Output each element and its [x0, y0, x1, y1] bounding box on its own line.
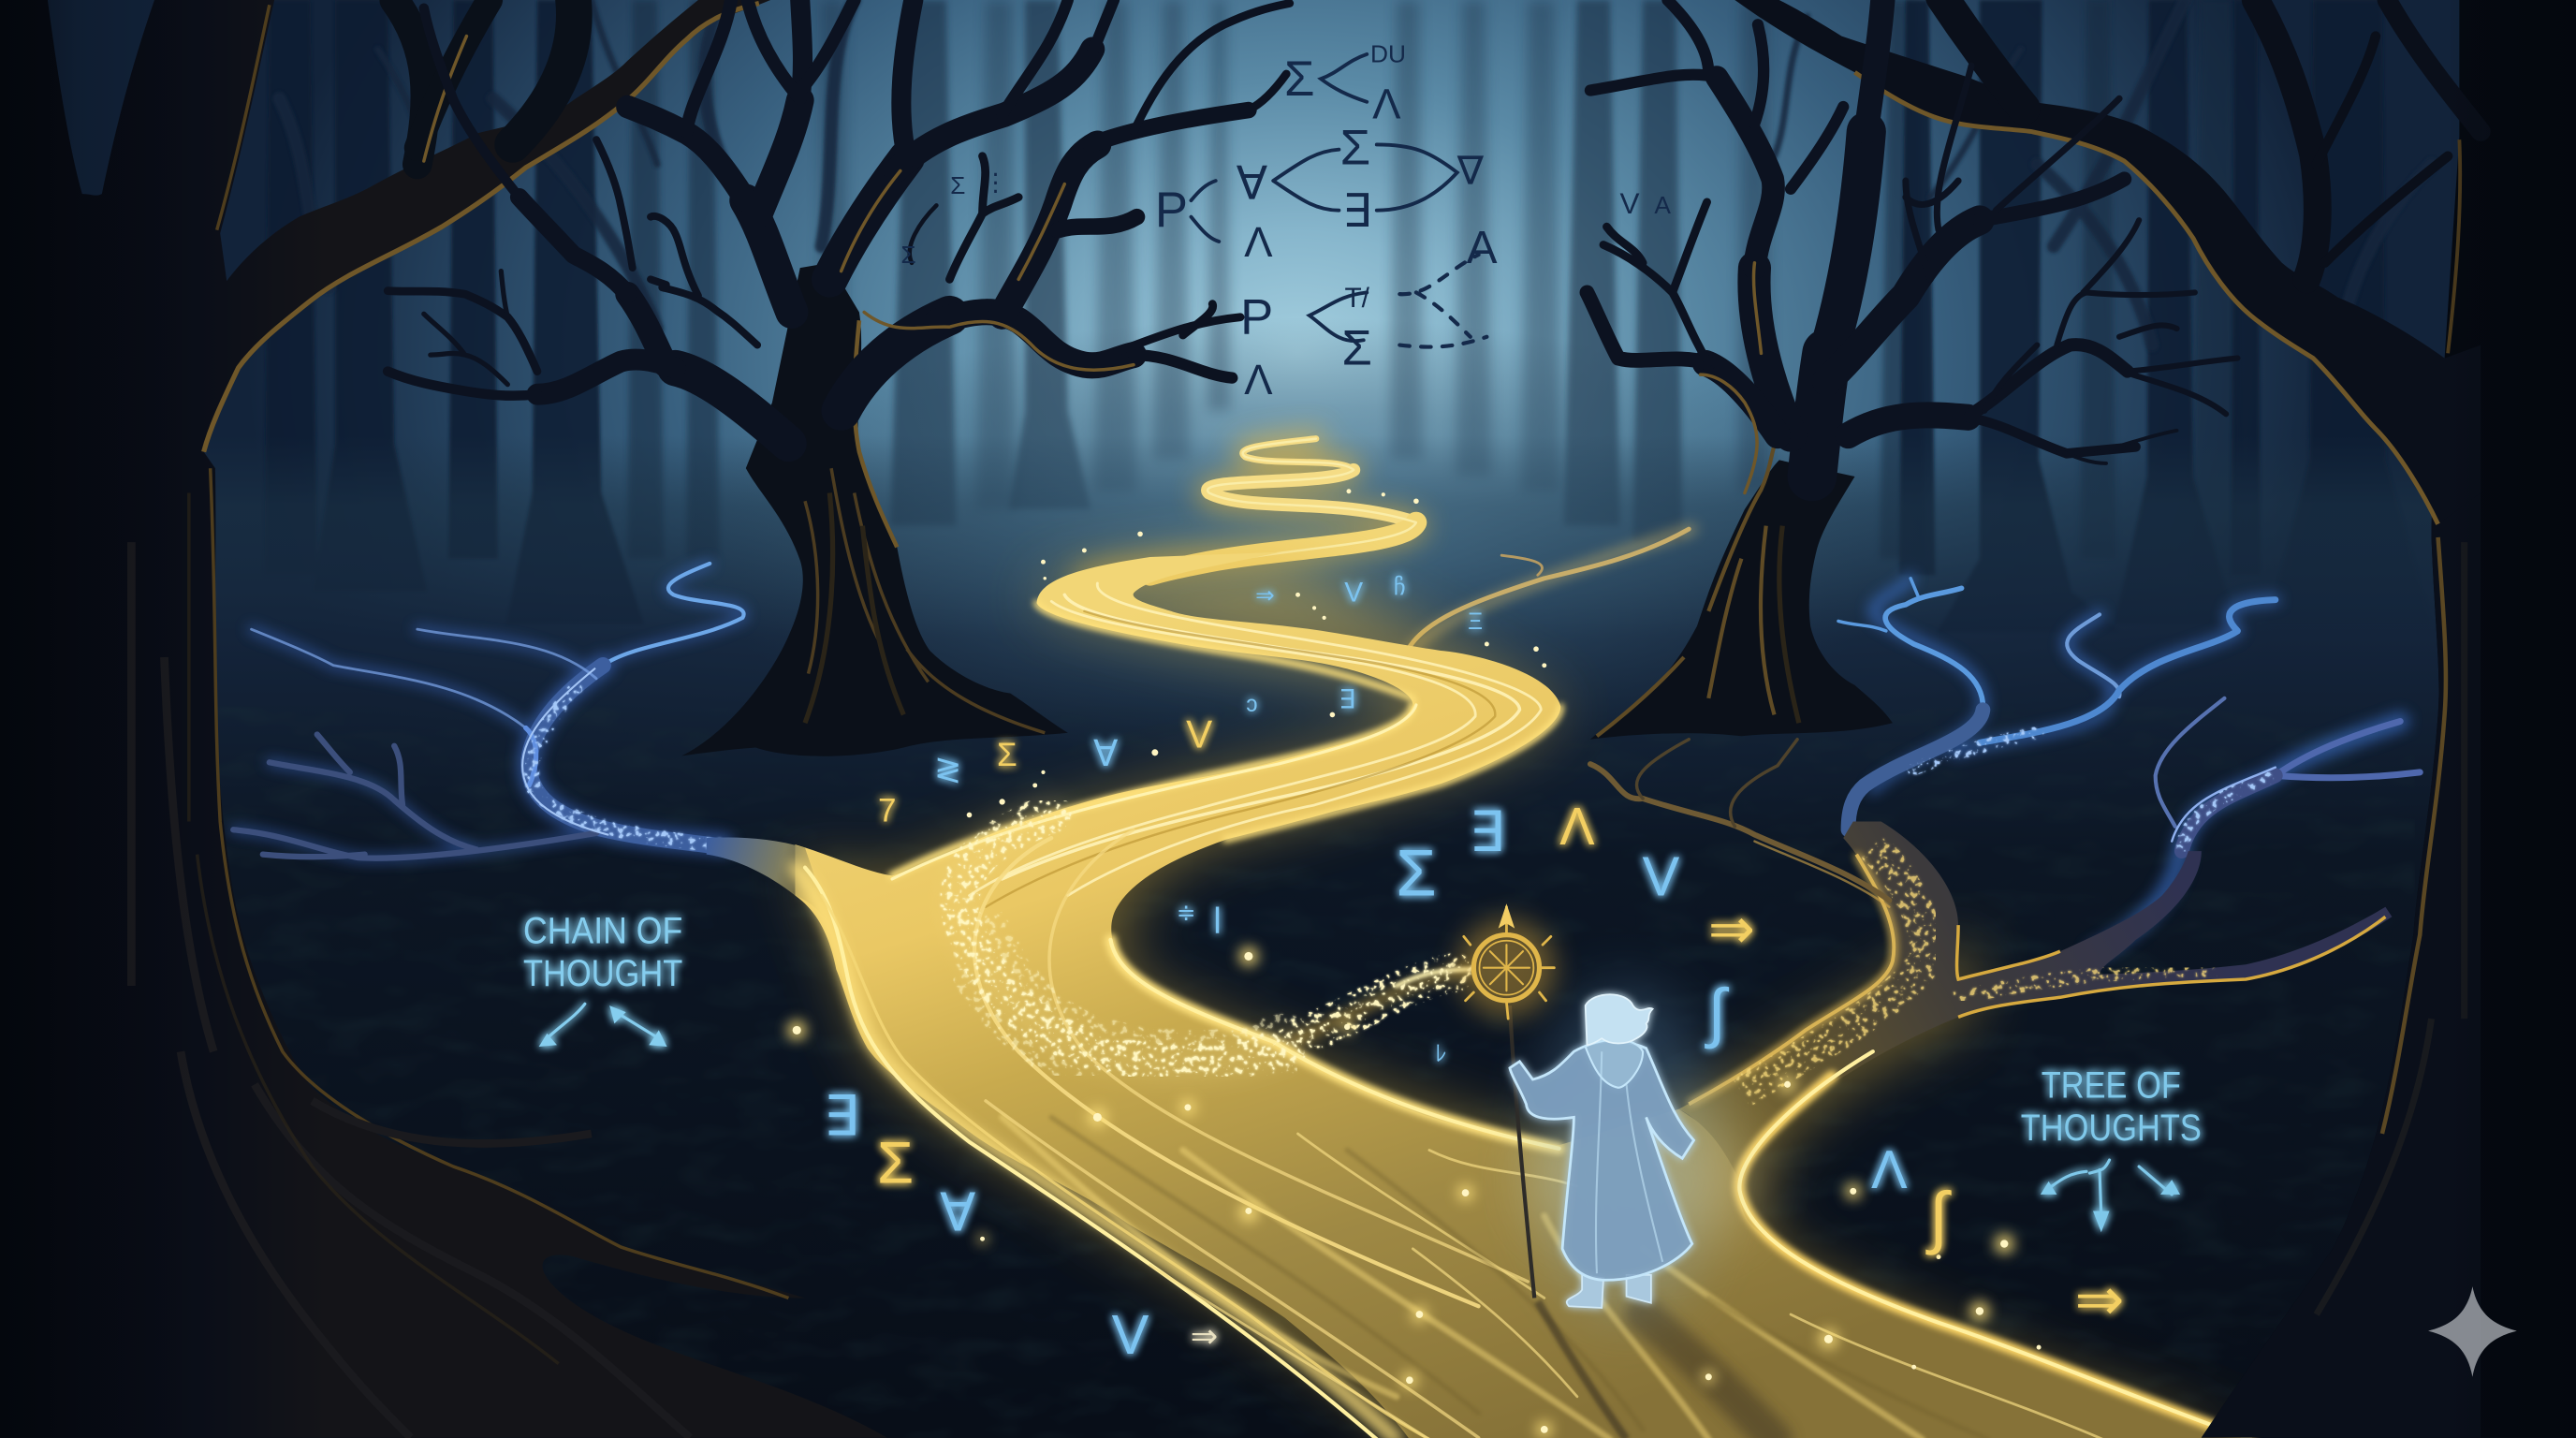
floating blue logic symbols: V — [1344, 577, 1363, 608]
floating gold logic symbols: ∫ — [1925, 1178, 1952, 1255]
floating gold logic symbols: Σ — [997, 737, 1017, 773]
label: tree of thoughts — [2021, 1064, 2202, 1232]
decision tree symbols woven in branches: Λ — [1372, 80, 1401, 127]
right giant tree — [2202, 0, 2576, 1438]
gold winding path: far squiggle — [1084, 439, 1417, 579]
floating blue logic symbols: ⇒ — [1191, 1318, 1218, 1355]
floating gold logic symbols: ⇒ — [2075, 1267, 2124, 1332]
floating blue logic symbols: Ξ — [1468, 609, 1483, 635]
floating blue logic symbols: ≑ — [1177, 901, 1195, 926]
brown roots joining the fork — [1590, 740, 1889, 907]
watermark star — [2428, 1286, 2517, 1377]
compass atop staff — [1457, 903, 1556, 1019]
decision tree symbols woven in branches: ∀ — [1237, 158, 1268, 209]
decision tree symbols woven in branches: P — [1240, 289, 1273, 345]
label: chain of thought: THOUGHT — [523, 953, 682, 994]
right mid tree — [1590, 435, 1893, 740]
floating blue logic symbols: Λ — [1871, 1140, 1908, 1200]
decision tree symbols woven in branches: T/ — [1344, 283, 1370, 314]
decision tree symbols woven in branches: ∇ — [1456, 149, 1485, 193]
floating blue logic symbols: V — [1112, 1303, 1149, 1366]
firefly orbs — [787, 489, 2042, 1438]
floating blue logic symbols: ∫ — [1704, 976, 1729, 1049]
secondary background branches — [279, 0, 2432, 345]
floating blue logic symbols: V — [1643, 844, 1680, 907]
misty light over the far ground — [657, 312, 1939, 788]
label: chain of thought — [523, 910, 682, 1047]
floating blue logic symbols: Ɩ — [1213, 902, 1222, 942]
floating gold logic symbols: Λ — [1559, 797, 1595, 856]
blue stream: right tree branches — [1838, 579, 2420, 953]
arrows: tree of thoughts — [2041, 1160, 2180, 1232]
glowing gold streaks on the road — [795, 583, 2250, 1438]
decision tree symbols woven in branches: Σ — [950, 171, 965, 199]
left mid tree — [681, 263, 1068, 756]
decision tree symbols woven in branches: A — [1467, 223, 1498, 273]
decision tree symbols woven in branches: V — [1620, 186, 1640, 220]
floating blue logic symbols: ⇒ — [1255, 583, 1275, 609]
floating gold logic symbols: V — [1186, 712, 1212, 756]
floating blue logic symbols — [824, 575, 1908, 1366]
label: tree of thoughts: TREE OF — [2042, 1064, 2181, 1106]
decision tree symbols woven in branches: ⋮ — [983, 169, 1008, 197]
decision tree symbols woven in branches: Λ — [1244, 356, 1273, 404]
floating gold logic symbols: 7 — [878, 793, 897, 829]
floating gold logic symbols: Σ — [877, 1131, 914, 1196]
floating blue logic symbols: ∃ — [1470, 800, 1504, 863]
figure: body and robe — [1510, 994, 1694, 1308]
floating gold logic symbols — [877, 712, 2124, 1332]
gold road — [707, 552, 2250, 1438]
side gold trail upper right — [1405, 529, 1692, 657]
decision tree symbols woven in branches: ∃ — [1342, 186, 1371, 237]
left mid tree branches — [388, 0, 1290, 444]
floating blue logic symbols: ∀ — [940, 1183, 975, 1242]
figure: robed traveler with staff — [1510, 986, 1717, 1314]
floating blue logic symbols: ∃ — [824, 1085, 858, 1148]
floating blue logic symbols: ∀ — [1093, 734, 1119, 774]
gold road right fork — [1679, 822, 2392, 1181]
glowing sparkle trail across the road from the compass — [960, 814, 1471, 1068]
decision tree symbols woven in branches: DU — [1370, 40, 1406, 68]
decision tree symbols woven in branches: Σ — [900, 241, 916, 269]
figure: staff — [1510, 1005, 1534, 1298]
floating blue logic symbols: ﾚ — [1435, 1042, 1446, 1067]
floating blue logic symbols: ჩ — [1394, 575, 1406, 600]
floating blue logic symbols: ∃ — [1339, 684, 1355, 713]
decision tree symbols woven in branches: P — [1155, 183, 1188, 238]
character shadow and haze on road — [1528, 1117, 1775, 1438]
left giant tree upper limbs — [394, 0, 574, 165]
decision tree symbols woven in branches: Σ — [1284, 51, 1315, 107]
forest floor — [0, 435, 2576, 1438]
grass tufts on forest floor — [213, 707, 2415, 1438]
blue stream: left chain branches — [233, 564, 744, 858]
label: tree of thoughts: THOUGHTS — [2021, 1108, 2202, 1149]
label: chain of thought: CHAIN OF — [523, 910, 682, 951]
arrows: chain of thought — [539, 1004, 667, 1047]
decision tree symbols woven in branches: Σ — [1341, 321, 1372, 376]
left giant tree — [0, 0, 887, 1438]
floating blue logic symbols: ≷ — [934, 752, 961, 788]
distant tree trunks — [265, 0, 2432, 633]
floating blue logic symbols: Σ — [1396, 835, 1437, 909]
decision tree symbols woven in branches: Σ — [1340, 121, 1370, 176]
floating gold logic symbols: ⇒ — [1708, 898, 1755, 961]
right mid tree branches — [1587, 0, 2237, 493]
decision tree symbols woven in branches: A — [1654, 191, 1671, 219]
right giant tree arching limbs — [1734, 0, 2481, 524]
floating blue logic symbols: ɔ — [1246, 692, 1258, 717]
decision tree symbols woven in branches: Λ — [1244, 218, 1273, 266]
decision tree symbols woven in branches — [900, 40, 1671, 404]
